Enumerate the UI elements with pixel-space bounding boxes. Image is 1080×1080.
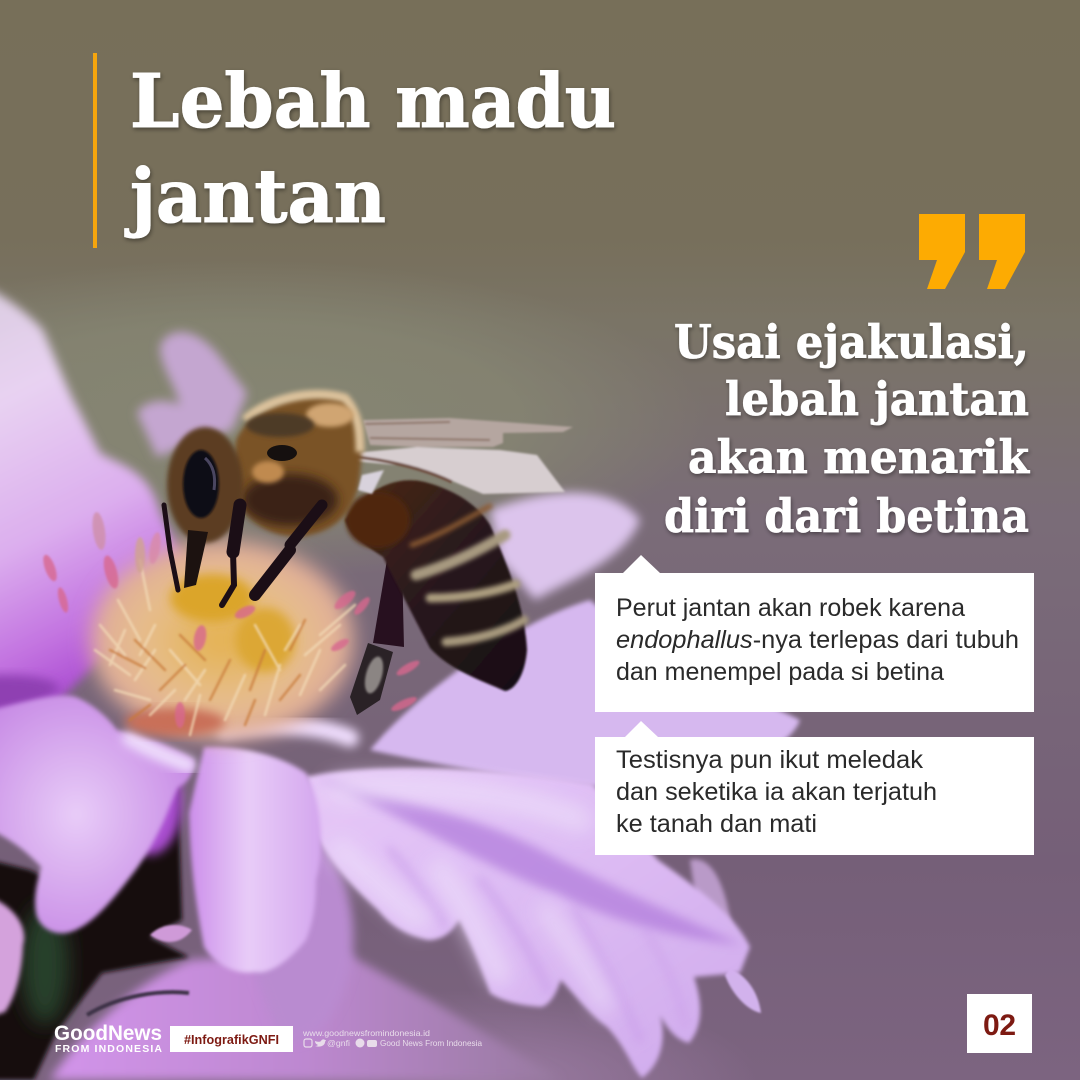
callout: robek [595,555,1034,712]
callout: robek: dan menempel pada si betina [616,658,944,686]
petal: center front [189,747,321,973]
bee head [167,427,243,588]
callout: testis: ke tanah dan mati [616,810,817,838]
petal: small far left [0,893,24,1020]
bee thorax [232,394,384,537]
stamen buds [41,511,421,728]
callout: testis: dan seketika ia akan terjatuh [616,778,937,806]
icon: facebook [356,1038,364,1048]
bee abdomen [345,480,527,691]
illustration: honey bee [164,394,573,715]
petal: bottom blurred [50,950,560,1080]
page number: 02 [983,1009,1016,1042]
footer: contacts: Good News From Indonesia [380,1038,482,1048]
petal: saturated shadow between left and center [118,745,182,855]
icon: twitter [315,1039,326,1047]
petal: left dark shadow [0,675,60,714]
footer: contacts: www.goodnewsfromindonesia.id [302,1028,430,1038]
footer: logo [54,1022,162,1055]
petal: fan crease shadow [316,778,742,945]
petal: right upper [490,492,640,600]
petal: behind center [250,830,353,1042]
petal: right lower wide [370,600,800,790]
petal: back small [137,332,247,457]
icon: instagram [304,1039,312,1047]
quote heading: Usai ejakulasi, [674,315,1029,369]
callout: robek: endophallus-nya terlepas dari tubuh [616,626,1019,654]
footer: hashtag [170,1026,293,1052]
petal: left front [0,695,194,933]
flower center: pollen stamens [41,511,421,740]
bee front legs [164,505,322,605]
footer: contacts [302,1028,482,1048]
title block [93,53,616,248]
callout: testis [595,721,1034,855]
bee wings [300,418,573,494]
footer: contacts: @gnfi [327,1038,350,1048]
petal highlights [340,788,605,1005]
title: jantan [124,154,386,240]
petal fold shadow [390,850,685,1040]
title: Lebah madu [130,59,616,145]
footer: logo: GoodNews [54,1022,162,1045]
title accent bar [93,53,97,248]
footer: logo: FROM INDONESIA [55,1043,162,1055]
petal: small far right [690,859,732,941]
callout: testis: Testisnya pun ikut meledak [616,746,923,774]
petal: front right fan [306,768,750,1078]
photo: purple aster flower [0,275,800,1080]
page number [967,994,1032,1053]
icon: youtube [367,1040,377,1047]
callout: robek: Perut jantan akan robek karena [616,594,965,622]
bee rear leg [350,560,404,715]
icon: quotation marks [919,214,1025,289]
quote heading: diri dari betina [664,489,1029,543]
quote heading [664,315,1030,543]
petal: large upper left [0,275,190,730]
title [124,59,616,240]
quote heading: lebah jantan [725,372,1029,426]
petal: top white highlights [130,726,350,765]
flower stem: dark green [0,787,192,1080]
quote heading: akan menarik [688,430,1030,484]
footer: hashtag: #InfografikGNFI [184,1032,279,1047]
